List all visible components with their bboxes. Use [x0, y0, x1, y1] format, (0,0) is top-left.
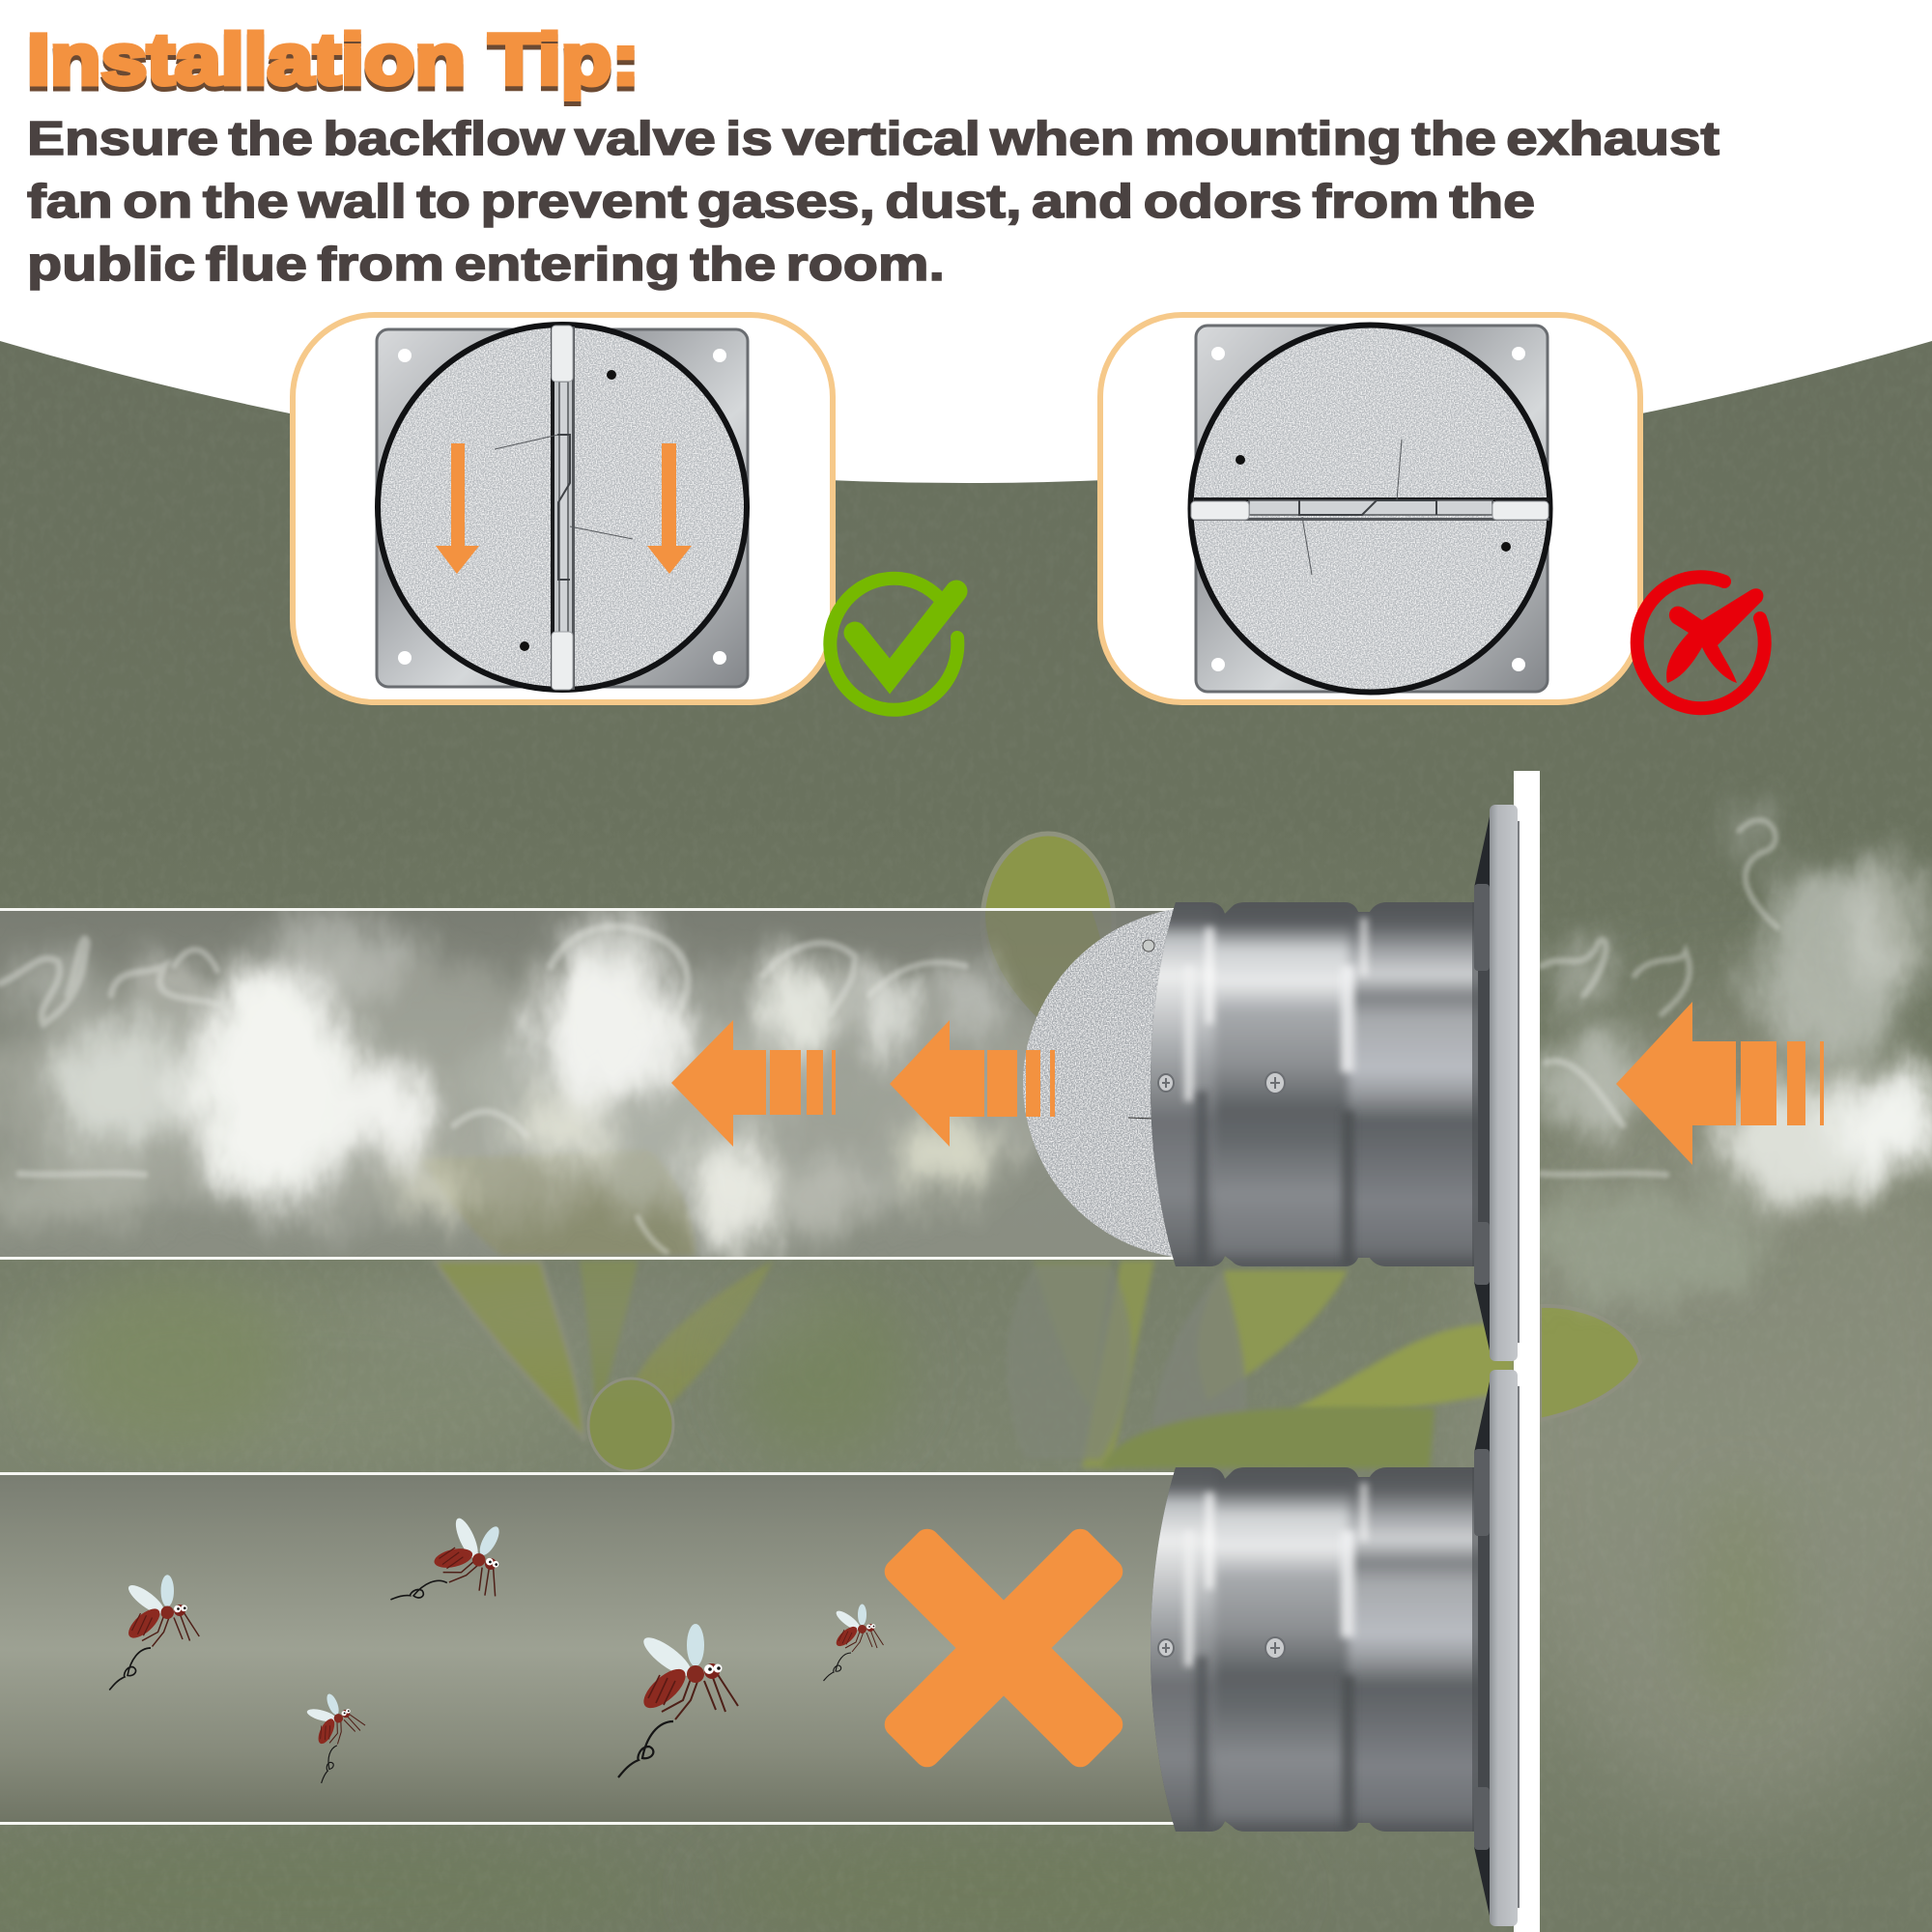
valve disc open, side view [1023, 908, 1180, 1258]
tube with smoke [0, 908, 1198, 1262]
tip text [27, 113, 1719, 291]
icon: red cross [1637, 577, 1765, 708]
arrow left [436, 443, 479, 574]
fan duct lower, closed [1140, 1370, 1520, 1926]
smoke cloud in tube [0, 911, 1082, 1262]
mosquito 3 [292, 1686, 379, 1783]
arrow right [647, 443, 692, 574]
mosquito 5 [823, 1604, 883, 1681]
smoke exiting on the right [1518, 804, 1932, 1304]
background plant leaves [58, 834, 1640, 1471]
tip text: Ensure the backflow valve is vertical when mounting the exhaust [27, 113, 1719, 165]
big orange X: blocked [879, 1523, 1128, 1773]
tip text: fan on the wall to prevent gases, dust, and odors from the [27, 176, 1535, 228]
valve disc [1192, 327, 1549, 692]
mosquito 1 [109, 1575, 199, 1690]
mosquito 4 [618, 1624, 738, 1777]
hinge [1191, 440, 1549, 575]
arrow 3 outside [1616, 1002, 1824, 1165]
fan duct upper, open [1140, 805, 1520, 1361]
valve plate [377, 329, 748, 687]
white wall strip [1514, 771, 1540, 1932]
right smoke wisps [1542, 820, 1777, 1175]
panel: correct vertical installation [293, 315, 833, 702]
leaf seen through tube [985, 911, 1116, 1024]
valve disc [379, 326, 746, 689]
tube outline top [0, 908, 1177, 911]
white header area with curved edge [0, 0, 1932, 483]
arrow 2 in tube [890, 1020, 1055, 1147]
mosquito 2 [390, 1499, 526, 1643]
title: Installation Tip: [27, 24, 639, 104]
arrow 1 in tube [671, 1020, 836, 1147]
tube outline bottom [0, 1257, 1177, 1260]
hinge [495, 326, 633, 690]
icon: green check [830, 579, 957, 710]
tube outline bottom [0, 1822, 1177, 1825]
smoke wisps [0, 926, 966, 1252]
tip text: public flue from entering the room. [27, 239, 945, 291]
tube outline top [0, 1472, 1177, 1475]
title: Installation Tip: [27, 19, 639, 99]
panel: incorrect horizontal installation [1100, 315, 1640, 702]
valve plate [1196, 326, 1548, 692]
tube with mosquitoes [0, 1472, 1177, 1825]
